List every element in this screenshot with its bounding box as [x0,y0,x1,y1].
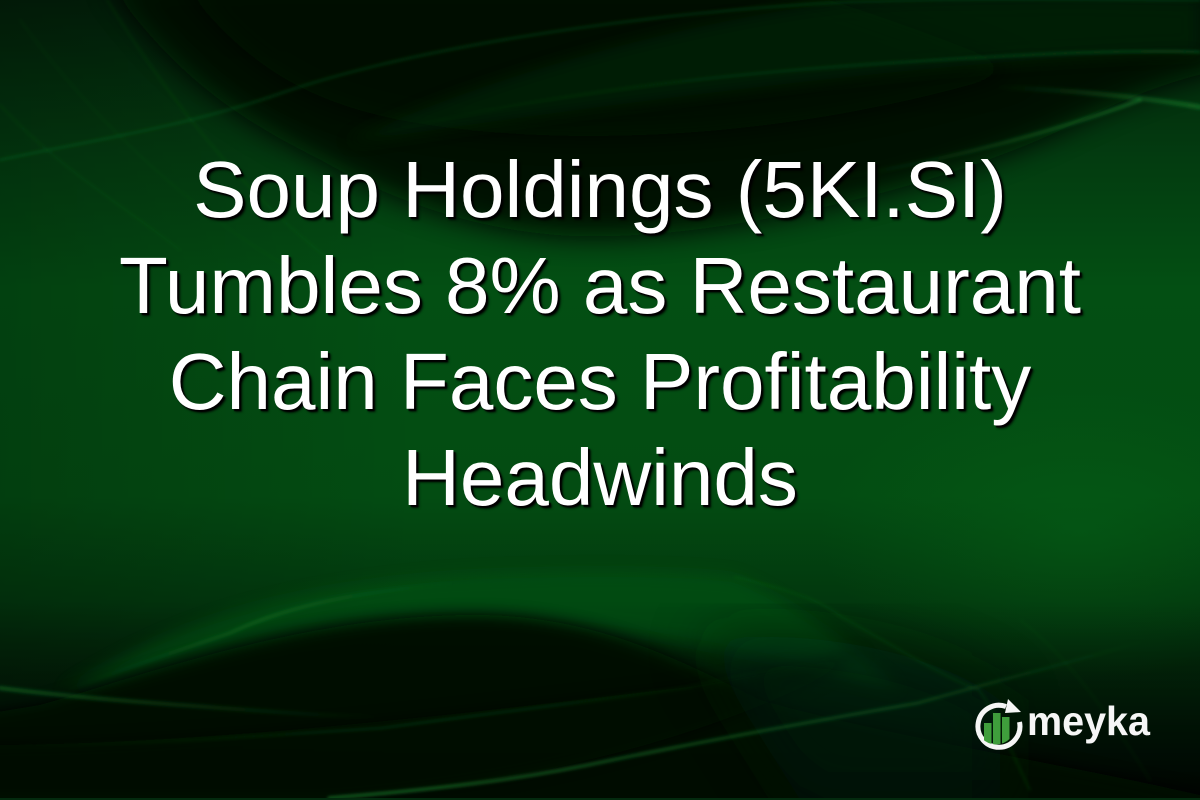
upper right lighter wedge [344,0,1200,143]
title: Soup Holdings (5KI.SI) Tumbles 8% as Restaurant Chain Faces Profitability Headwinds [119,145,1081,522]
logo: meyka [975,698,1151,750]
swoosh above bottom arch [61,571,900,693]
bottom dark arch [0,615,1200,800]
lower band [0,650,865,800]
glow mid right [820,380,1200,680]
wordmark: meyka [1027,698,1151,744]
dark blob upper [107,0,1200,236]
bottom edge line [0,798,1200,800]
icon: ring with bars and arrow [978,699,1021,747]
